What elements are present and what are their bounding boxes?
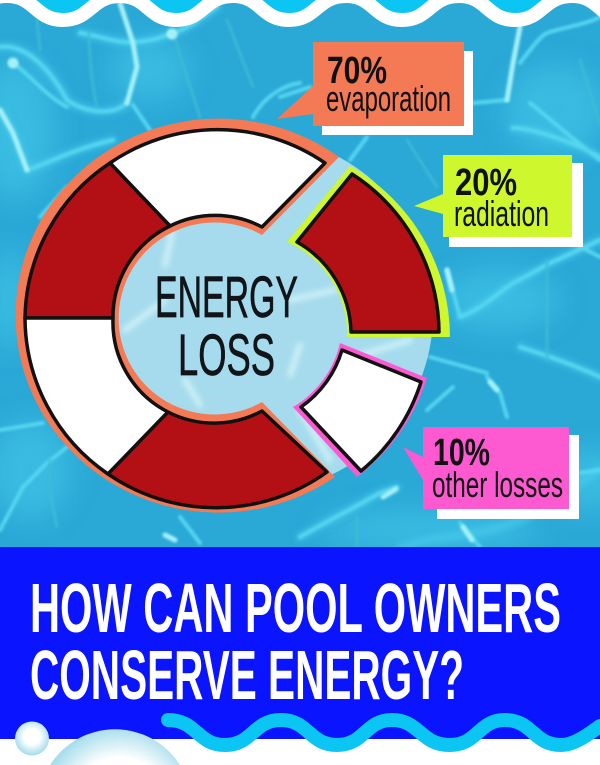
- ring segment: top white: [110, 130, 325, 227]
- callout: 70% evaporation: 70%: [327, 50, 387, 92]
- callout: 20% radiation: 20%: [455, 162, 517, 204]
- lifebuoy segment: 20% radiation: [287, 166, 450, 337]
- lifebuoy segment: 10% other losses: [293, 343, 427, 477]
- bubble: large: [50, 729, 180, 765]
- centre label: ENERGY LOSS: LOSS: [178, 323, 275, 388]
- callout: 20% radiation: [414, 155, 583, 247]
- top wave border: [0, 0, 600, 20]
- bottom wave: [168, 720, 600, 745]
- translucent disc behind the lifebuoy: [77, 136, 433, 492]
- callout: 20% radiation: radiation: [454, 193, 549, 234]
- centre label: ENERGY LOSS: ENERGY: [155, 265, 298, 330]
- ring segment: lower left white: [25, 318, 168, 474]
- ring segment: left red: [25, 163, 170, 318]
- lifebuoy: main ring (orange outline, 70% evaporation): [16, 119, 339, 513]
- centre label: ENERGY LOSS: [155, 265, 298, 388]
- background: pool water: [0, 0, 600, 550]
- light reflections inside the disc: [125, 232, 410, 460]
- ring segment: bottom red: [108, 411, 327, 508]
- callout: 10% other losses: 10%: [433, 432, 490, 474]
- title: [30, 569, 561, 714]
- bubble: small: [15, 722, 49, 756]
- callout: 70% evaporation: [277, 42, 473, 135]
- callout: 70% evaporation: evaporation: [326, 78, 451, 119]
- callout: 10% other losses: [403, 427, 579, 519]
- blue title band: [0, 547, 600, 739]
